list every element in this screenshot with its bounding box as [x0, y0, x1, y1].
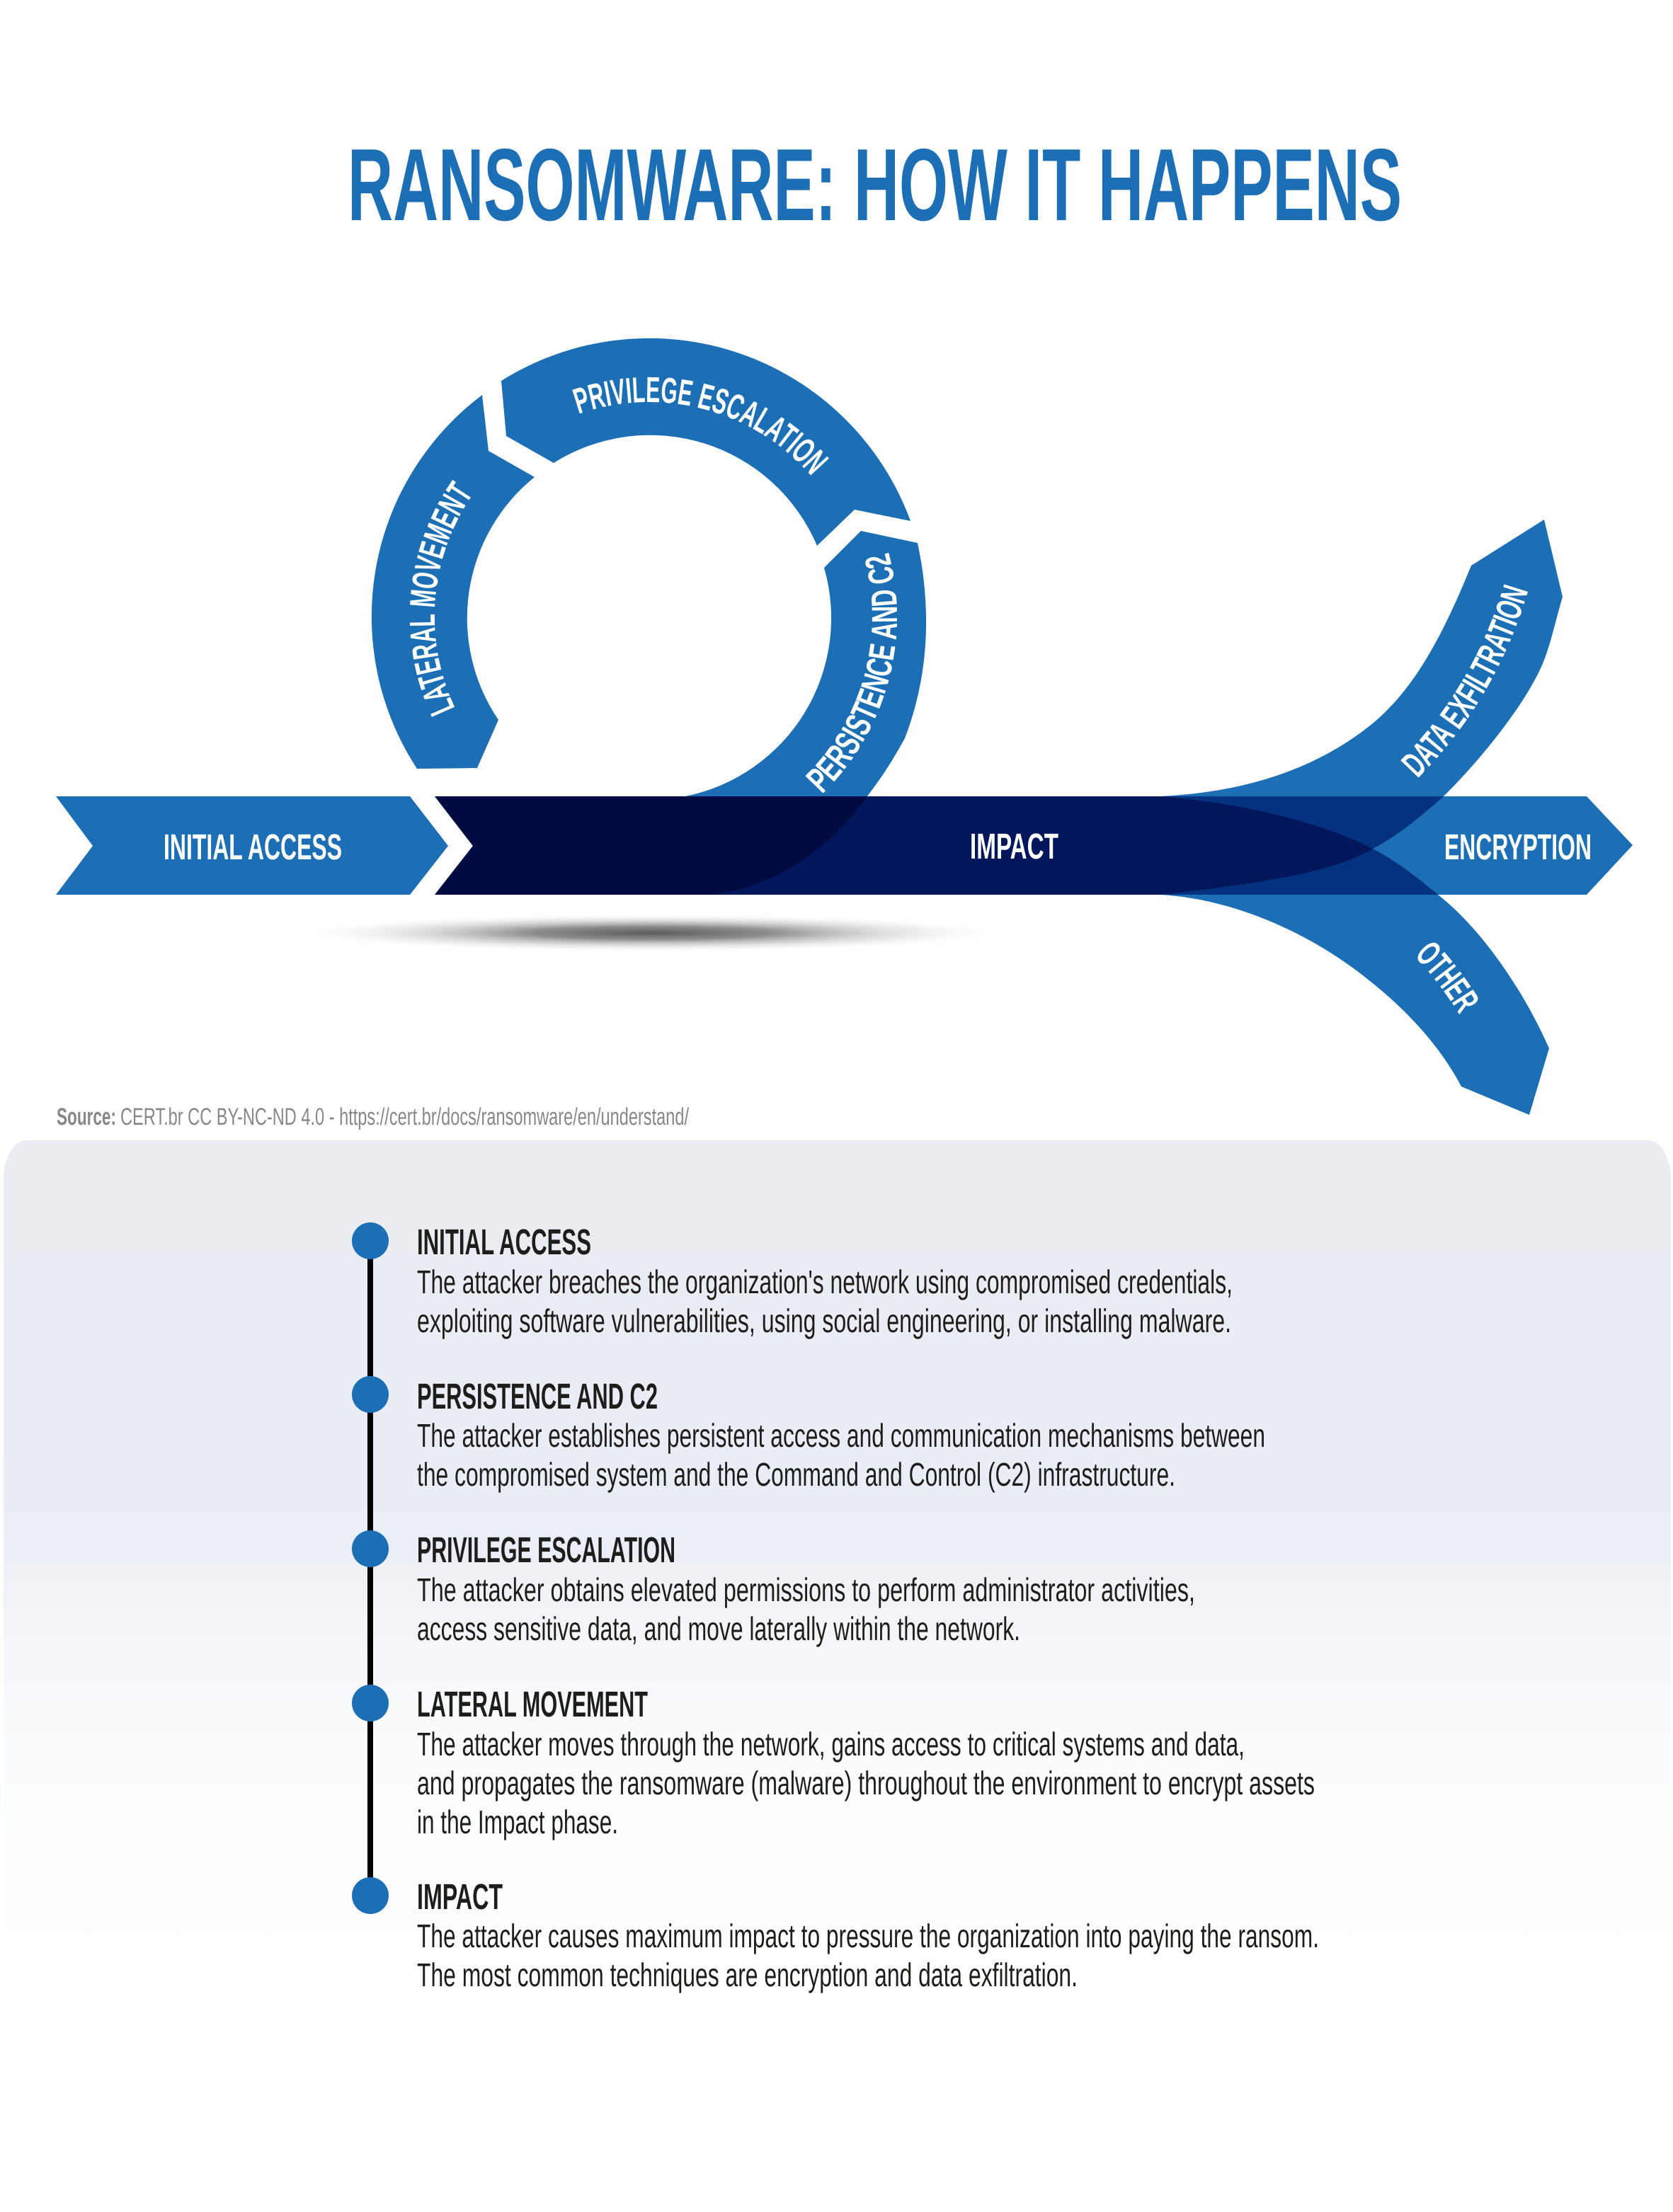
- text block: lateral movement: in the Impact phase.: [417, 1804, 618, 1840]
- label: impact: IMPACT: [970, 826, 1058, 866]
- label: lateral movement: LATERAL MOVEMENT: [409, 480, 471, 717]
- label: privilege escalation: PRIVILEGE ESCALATION: [572, 377, 829, 476]
- timeline spine: [367, 1241, 373, 1896]
- source credit: CERT.br CC BY-NC-ND 4.0 - https://cert.br/docs/ransomware/en/understand/: [120, 1104, 689, 1130]
- label: encryption: ENCRYPTION: [1444, 827, 1592, 867]
- label: persistence and C2: PERSISTENCE AND C2: [806, 553, 898, 793]
- text block: initial access: exploiting software vulnerabilities, using social engineering, or installing malware.: [417, 1302, 1231, 1339]
- text block: lateral movement: The attacker moves through the network, gains access to critical systems and data,: [417, 1726, 1245, 1763]
- text block: initial access: INITIAL ACCESS: [417, 1222, 591, 1262]
- text block: privilege escalation: The attacker obtains elevated permissions to perform administrator activities,: [417, 1571, 1195, 1608]
- text block: persistence and C2: The attacker establishes persistent access and communication mechanisms between: [417, 1417, 1265, 1454]
- timeline dot 2: [352, 1376, 389, 1413]
- panel: explanation background: [4, 1140, 1671, 2212]
- text block: impact: The most common techniques are encryption and data exfiltration.: [417, 1956, 1078, 1993]
- arrow: initial access chevron: [56, 796, 448, 895]
- arrow: encryption: [435, 796, 1633, 895]
- text block: persistence and C2: the compromised system and the Command and Control (C2) infrastructure.: [417, 1456, 1175, 1493]
- timeline dot 5: [352, 1877, 389, 1914]
- timeline dot 4: [352, 1685, 389, 1721]
- text block: lateral movement: LATERAL MOVEMENT: [417, 1684, 648, 1724]
- label: data exfiltration: DATA EXFILTRATION: [1400, 585, 1528, 778]
- arrow: other branch: [435, 796, 1549, 1115]
- source credit: [57, 1104, 689, 1130]
- source credit: Source:: [57, 1104, 116, 1130]
- ring segment: lateral movement: [372, 395, 535, 769]
- text block: lateral movement: [417, 1684, 1315, 1840]
- timeline dot 1: [352, 1222, 389, 1259]
- text block: initial access: The attacker breaches the organization's network using compromised credentials,: [417, 1263, 1233, 1300]
- label: other: OTHER: [1417, 943, 1478, 1015]
- timeline dot 3: [352, 1530, 389, 1567]
- flow diagram: [56, 338, 1633, 1115]
- text block: privilege escalation: PRIVILEGE ESCALATION: [417, 1530, 675, 1570]
- arrow: data exfiltration branch: [435, 520, 1563, 895]
- timeline: [352, 1222, 389, 1914]
- text block: initial access: [417, 1222, 1233, 1339]
- text block: persistence and C2: PERSISTENCE AND C2: [417, 1376, 658, 1416]
- label: initial access: INITIAL ACCESS: [164, 827, 342, 867]
- ring segment: privilege escalation: [501, 338, 910, 546]
- text block: persistence and C2: [417, 1376, 1265, 1493]
- text block: privilege escalation: access sensitive data, and move laterally within the network.: [417, 1610, 1020, 1647]
- ring segment: persistence and C2: [435, 531, 926, 895]
- text block: privilege escalation: [417, 1530, 1195, 1647]
- shadow under the loop: [312, 915, 991, 951]
- text block: impact: [417, 1876, 1319, 1993]
- text block: impact: IMPACT: [417, 1876, 503, 1917]
